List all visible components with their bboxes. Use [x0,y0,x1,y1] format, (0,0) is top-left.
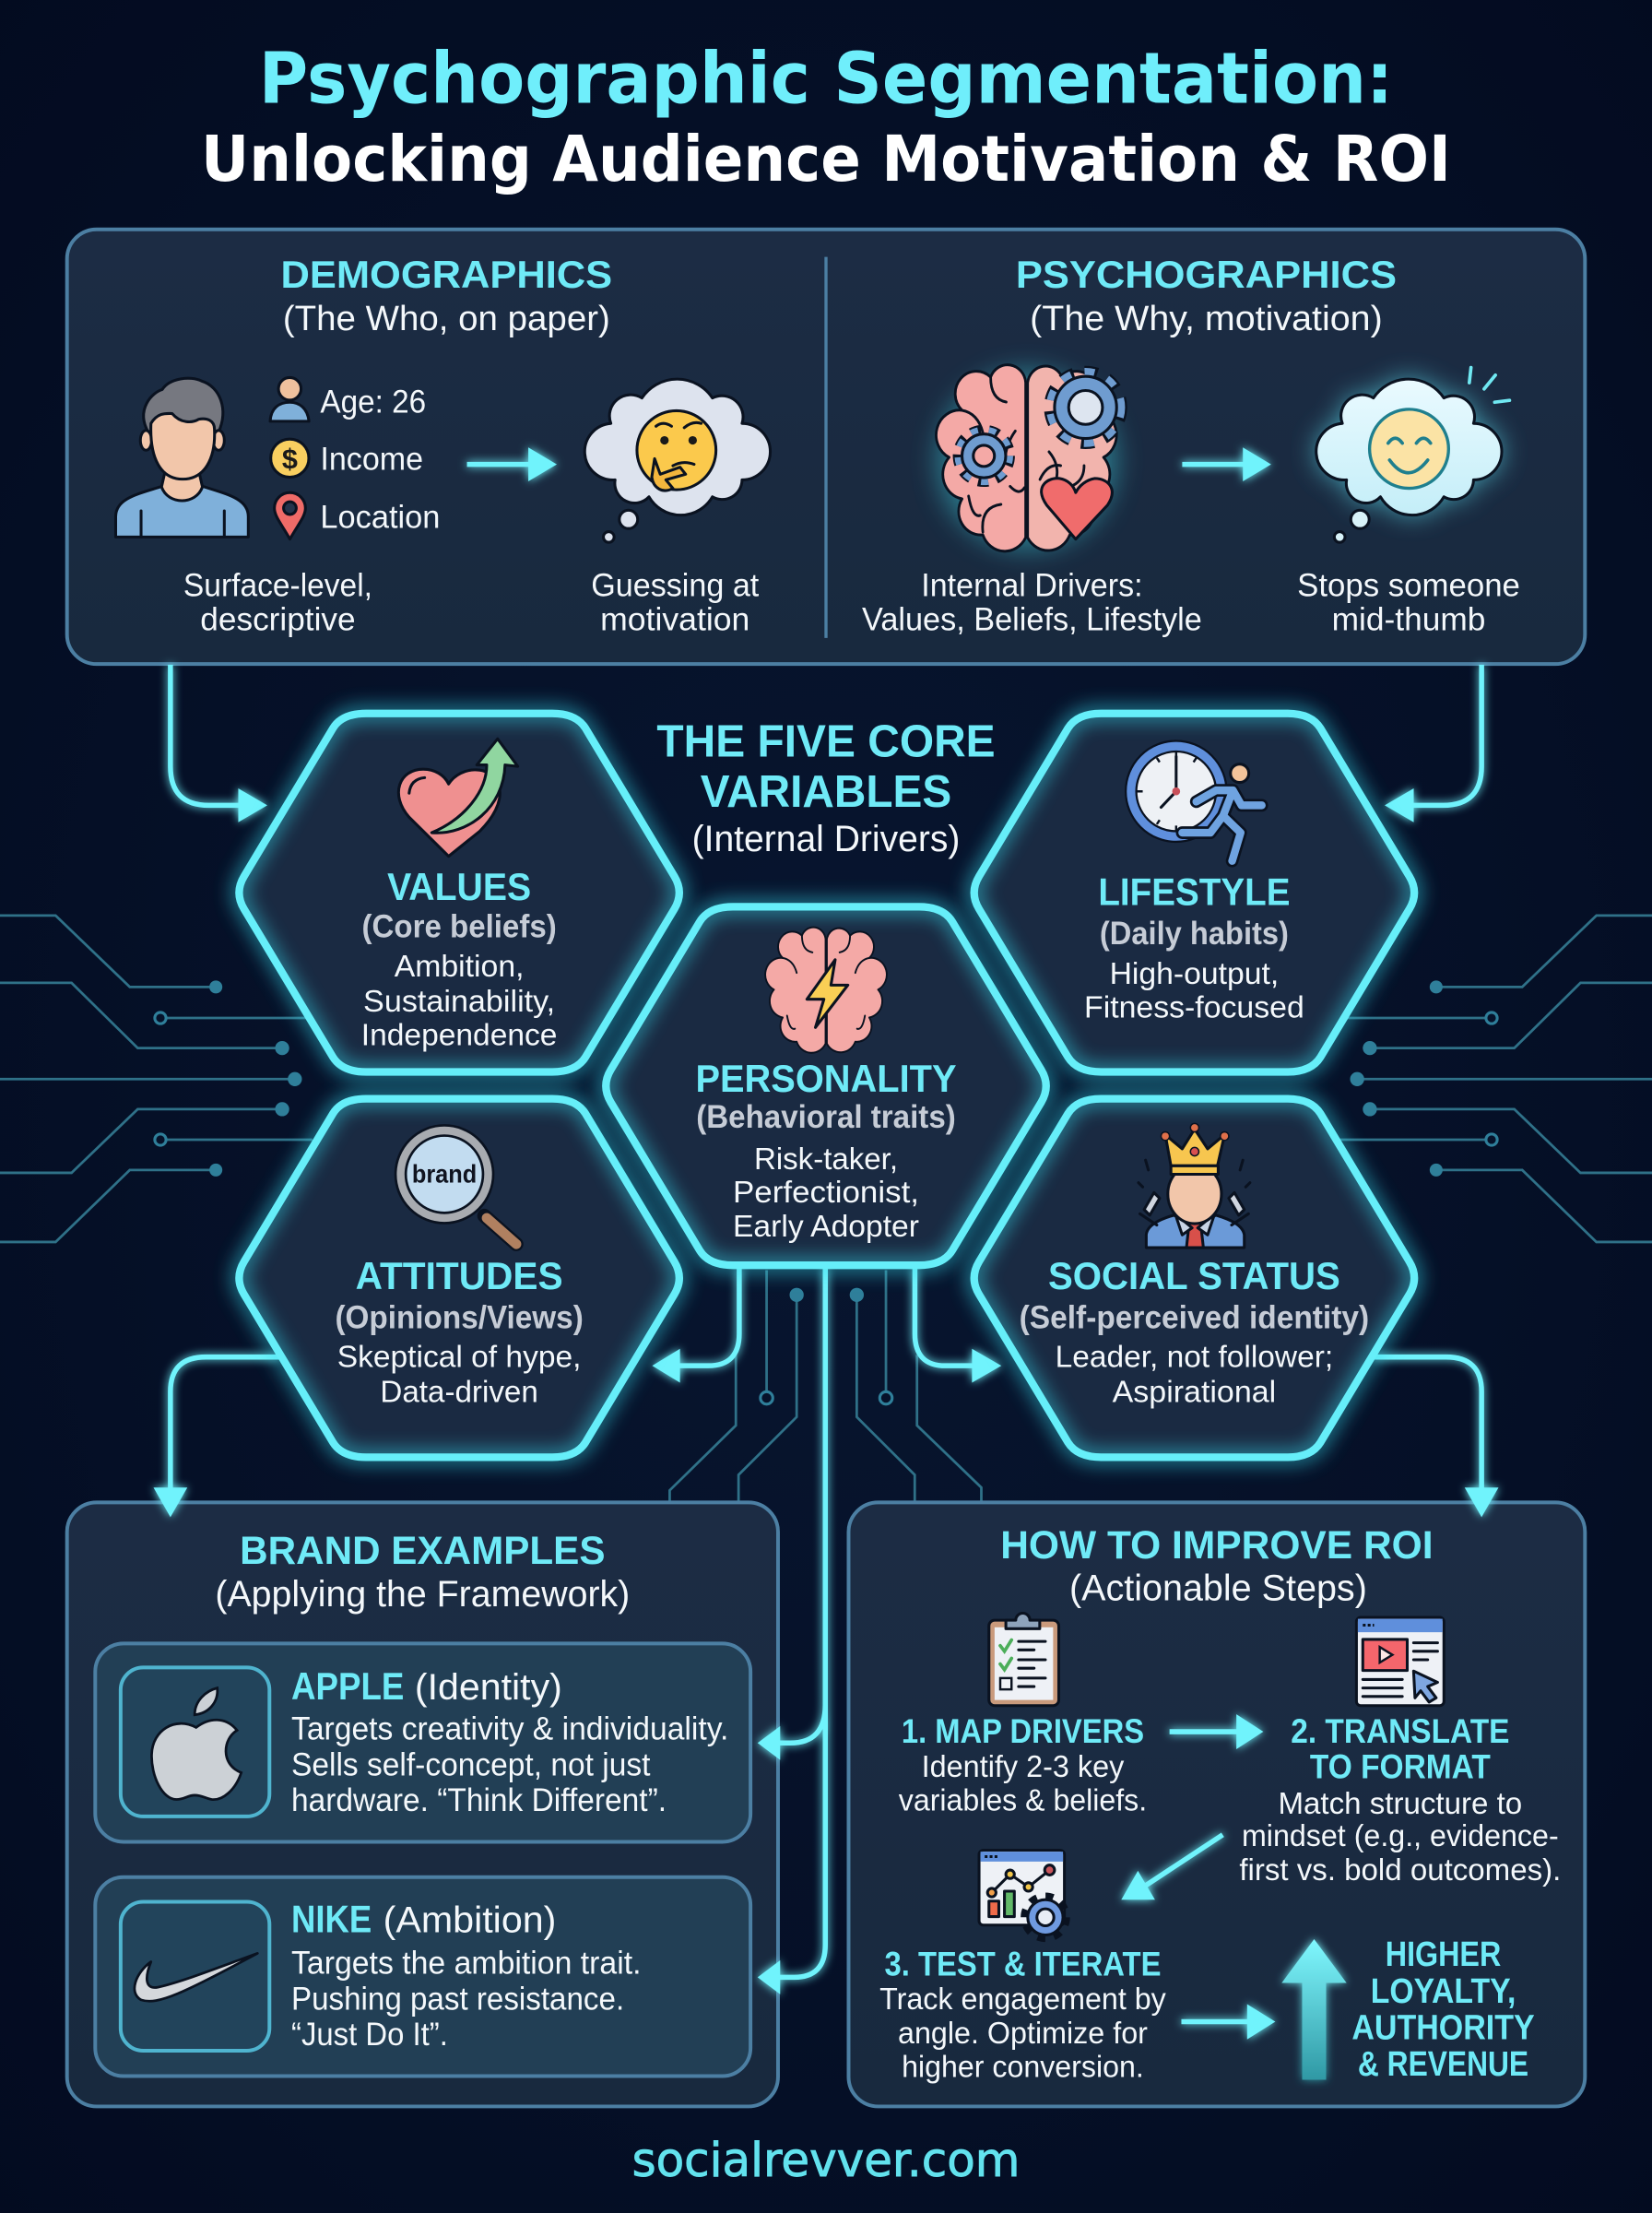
heading: five core variables [656,716,996,859]
icon: clock and runner [1131,746,1262,861]
hexagon: personality [606,906,1046,1265]
title: Unlocking Audience Motivation & ROI [201,124,1451,196]
step 2 text: TO FORMAT [1310,1748,1491,1786]
values text [361,866,557,1052]
values text: Ambition, [395,950,525,984]
step 3 text: higher conversion. [902,2050,1144,2084]
step 1 text: 1. MAP DRIVERS [902,1712,1144,1750]
ROI heading: HOW TO IMPROVE ROI [1000,1523,1434,1568]
personality text: Early Adopter [733,1210,919,1244]
psychographics captions: Stops someone [1297,568,1520,604]
step 2 text: mindset (e.g., evidence- [1242,1819,1559,1853]
demographics arrow [467,447,557,481]
demographic attributes list: Location [320,499,440,535]
attitudes text: Skeptical of hype, [337,1340,581,1374]
step 3 text: Track engagement by [879,1982,1166,2017]
demographics captions: Guessing at [591,568,760,604]
brand heading: (Applying the Framework) [215,1574,630,1615]
nike text: “Just Do It”. [291,2017,448,2053]
demographics captions: Surface-level, [183,568,372,604]
apple text: Targets creativity & individuality. [291,1711,728,1747]
demographic attributes list [270,377,440,539]
personality text: PERSONALITY [695,1058,957,1100]
arrow: psychographics to lifestyle [1385,665,1481,822]
result text: LOYALTY, [1371,1971,1516,2011]
icon: magnifier brand: brand [412,1160,477,1189]
icon: brain with lightning [765,928,887,1053]
values text: Independence [361,1018,557,1052]
psychographics arrow [1182,447,1271,481]
panel: how to improve ROI [848,1502,1585,2106]
demographic attributes list: Income [320,442,423,478]
brand heading: BRAND EXAMPLES [240,1529,606,1573]
step 2 text: 2. TRANSLATE [1291,1712,1509,1750]
icon: dollar coin: $ [282,444,298,475]
circuit traces below personality [669,1271,981,1502]
icon: analytics window with gear [979,1851,1065,1936]
values text: (Core beliefs) [362,908,557,944]
result text: HIGHER [1386,1935,1501,1974]
hexagon: values [239,714,679,1071]
apple text: Sells self-concept, not just [291,1747,651,1783]
circuit traces right [1339,916,1652,1242]
arrow: attitudes to brand examples [153,1357,279,1517]
personality text: (Behavioral traits) [696,1099,956,1135]
apple text: hardware. “Think Different”. [291,1782,667,1818]
psychographics captions: Values, Beliefs, Lifestyle [862,601,1202,637]
demographics captions [183,568,760,637]
apple text [291,1665,728,1818]
social status text: (Self-perceived identity) [1020,1299,1369,1335]
arrow: step 2 to step 3 [1121,1835,1222,1899]
card: nike [95,1877,750,2077]
attitudes text: ATTITUDES [356,1255,563,1297]
apple text: APPLE [291,1665,404,1708]
icon: person [115,378,248,537]
icon: location pin [275,492,305,539]
step 3 text: angle. Optimize for [898,2017,1148,2051]
result text: & REVENUE [1358,2044,1528,2084]
card: apple [95,1643,750,1841]
hexagon: attitudes [239,1099,679,1457]
heading: five core variables: (Internal Drivers) [692,819,960,859]
lifestyle text: LIFESTYLE [1098,871,1290,914]
heading: five core variables: THE FIVE CORE [656,716,996,766]
panel: brand examples [67,1502,778,2106]
step 3 text [879,1945,1166,2084]
step 1 text: variables & beliefs. [899,1783,1147,1817]
icon: age person [270,377,309,421]
arrow: step 3 to result [1181,2004,1275,2040]
step 2 text: Match structure to [1278,1787,1522,1821]
nike text: Pushing past resistance. [291,1982,624,2018]
social status text: SOCIAL STATUS [1048,1255,1340,1297]
personality text: Perfectionist, [733,1176,919,1210]
heading: five core variables: VARIABLES [701,767,951,817]
hexagon: lifestyle [974,714,1414,1071]
icon: dollar coin [271,439,309,478]
social status text [1020,1255,1369,1410]
footer url: socialrevver.com [632,2133,1020,2187]
icon: thinking cloud [584,379,771,542]
psychographics captions: Internal Drivers: [921,568,1143,604]
demographics captions: motivation [600,601,749,637]
icon: clipboard checklist [989,1613,1059,1706]
arrow: big up arrow [1281,1939,1347,2080]
brand heading [215,1529,630,1615]
icon: heart with arrow [398,739,518,857]
icon: happy cloud [1316,368,1509,542]
lifestyle text: Fitness-focused [1084,991,1304,1025]
arrow: social status to ROI [1373,1357,1499,1517]
icon: apple logo [151,1688,242,1800]
arrow: personality to social status [914,1267,1001,1383]
step 2 text [1239,1712,1561,1888]
arrow: step 1 to step 2 [1170,1714,1263,1749]
psychographics heading [1016,254,1397,338]
step 1 text: Identify 2-3 key [922,1750,1124,1784]
nike text [291,1898,642,2053]
personality text [695,1058,957,1244]
lifestyle text: High-output, [1110,957,1279,991]
arrow: personality to attitudes [652,1267,739,1383]
result text: AUTHORITY [1351,2008,1535,2048]
lifestyle text: (Daily habits) [1100,916,1289,952]
circuit traces left [0,916,313,1242]
demographics captions: descriptive [200,601,356,637]
psychographics heading: (The Why, motivation) [1030,299,1383,338]
attitudes text: (Opinions/Views) [335,1299,584,1335]
lifestyle text [1084,871,1304,1025]
psychographics captions [862,568,1520,637]
personality text: Risk-taker, [754,1142,898,1177]
demographics heading [281,254,612,338]
social status text: Aspirational [1113,1376,1276,1410]
apple text: (Identity) [415,1667,562,1708]
icon: web page with video [1356,1617,1444,1706]
panel: demographics vs psychographics [67,230,1585,664]
psychographics captions: mid-thumb [1332,601,1485,637]
icon: crowned leader [1139,1123,1250,1248]
arrow: demographics to values [171,665,267,822]
title [201,39,1451,196]
result text [1351,1935,1535,2084]
nike text: Targets the ambition trait. [291,1946,642,1982]
social status text: Leader, not follower; [1056,1340,1333,1374]
psychographics heading: PSYCHOGRAPHICS [1016,254,1397,296]
icon: swoosh [135,1953,257,2001]
values text: Sustainability, [363,985,555,1019]
demographic attributes list: Age: 26 [320,385,426,420]
hexagon: social status [974,1099,1414,1457]
ROI heading: (Actionable Steps) [1069,1568,1367,1609]
values text: VALUES [387,866,531,908]
step 3 text: 3. TEST & ITERATE [885,1945,1161,1982]
nike text: (Ambition) [384,1899,556,1940]
attitudes text: Data-driven [380,1376,538,1410]
attitudes text [335,1255,584,1410]
step 2 text: first vs. bold outcomes). [1239,1853,1561,1888]
title: Psychographic Segmentation: [259,39,1393,121]
icon: magnifier brand [401,1130,516,1244]
nike text: NIKE [291,1898,372,1940]
icon: brain with gears and heart [937,365,1121,551]
ROI heading [1000,1523,1434,1609]
demographics heading: (The Who, on paper) [283,299,610,338]
demographics heading: DEMOGRAPHICS [281,254,612,296]
arrow: personality to brand cards [758,1267,825,1994]
step 1 text [899,1712,1147,1817]
